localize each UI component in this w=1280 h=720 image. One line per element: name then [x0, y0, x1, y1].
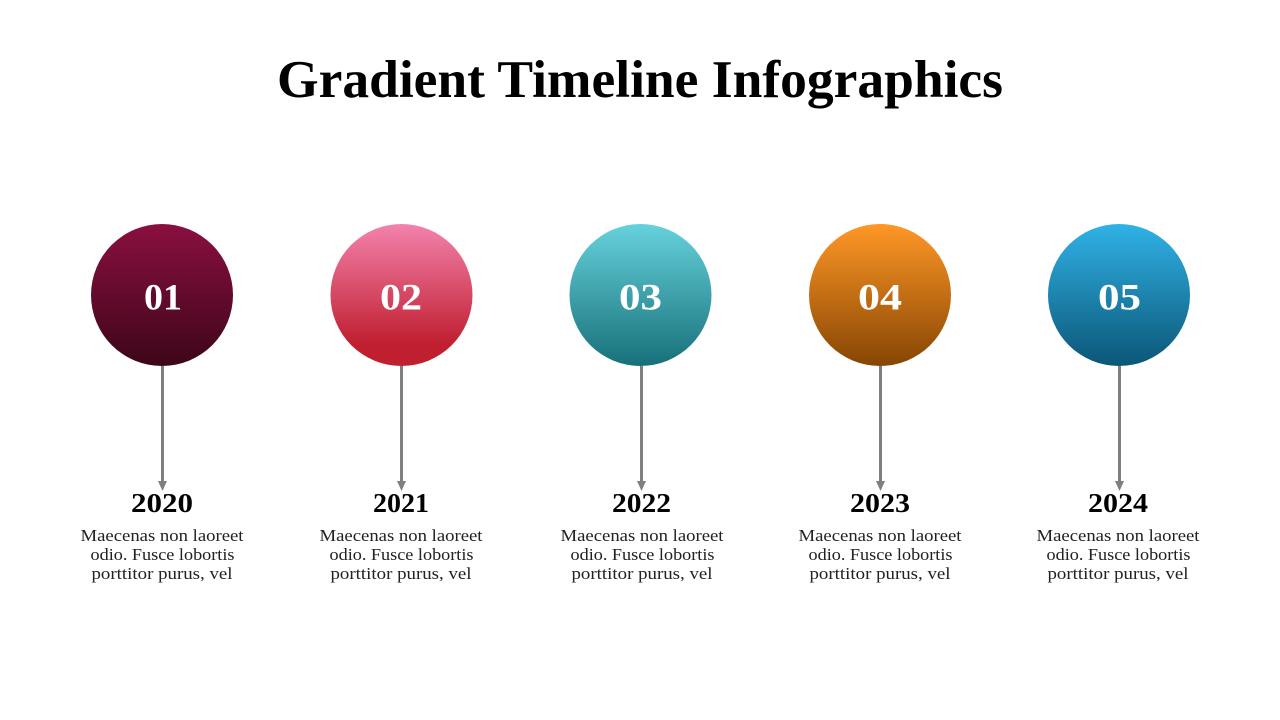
arrow 2 [397, 366, 406, 491]
year 2024: 2024 [1088, 487, 1148, 518]
timeline step 3: 2022 [560, 224, 724, 583]
description 2: odio. Fusce lobortis [330, 545, 474, 564]
description 2: porttitor purus, vel [330, 564, 472, 583]
circle 02 [330, 224, 472, 366]
year 2022: 2022 [612, 487, 671, 518]
year 2023: 2023 [850, 487, 910, 518]
description 5: porttitor purus, vel [1048, 564, 1189, 583]
timeline step 4: 2023 [798, 224, 962, 583]
number 05: 05 [1098, 278, 1141, 318]
title: Gradient Timeline Infographics [277, 51, 1003, 109]
number 03: 03 [619, 278, 662, 318]
description 3: porttitor purus, vel [572, 564, 713, 583]
timeline step 1: 2020 [80, 224, 244, 583]
number 02: 02 [380, 278, 422, 318]
circle 01 [91, 224, 233, 366]
description 4: Maecenas non laoreet [798, 526, 962, 545]
description 4: odio. Fusce lobortis [808, 545, 952, 564]
description 1: odio. Fusce lobortis [90, 545, 234, 564]
description 1: porttitor purus, vel [92, 564, 233, 583]
arrow 3 [637, 366, 646, 491]
arrow 5 [1115, 366, 1124, 491]
timeline step 5: 2024 [1036, 224, 1200, 583]
description 4 [798, 526, 962, 583]
circle 04 [809, 224, 951, 366]
description 1 [80, 526, 244, 583]
description 3 [560, 526, 724, 583]
description 5 [1036, 526, 1200, 583]
circle 05 [1048, 224, 1190, 366]
timeline step 2: 2021 [320, 224, 483, 583]
description 4: porttitor purus, vel [810, 564, 951, 583]
description 2 [320, 526, 483, 583]
description 1: Maecenas non laoreet [80, 526, 244, 545]
arrow 1 [158, 366, 167, 491]
description 5: Maecenas non laoreet [1036, 526, 1200, 545]
year 2020: 2020 [131, 487, 193, 518]
description 3: Maecenas non laoreet [560, 526, 724, 545]
description 2: Maecenas non laoreet [320, 526, 483, 545]
description 3: odio. Fusce lobortis [570, 545, 714, 564]
circle 03 [570, 224, 712, 366]
year 2021: 2021 [373, 487, 429, 518]
description 5: odio. Fusce lobortis [1046, 545, 1190, 564]
number 04: 04 [858, 278, 902, 318]
arrow 4 [876, 366, 885, 491]
number 01: 01 [144, 278, 182, 318]
